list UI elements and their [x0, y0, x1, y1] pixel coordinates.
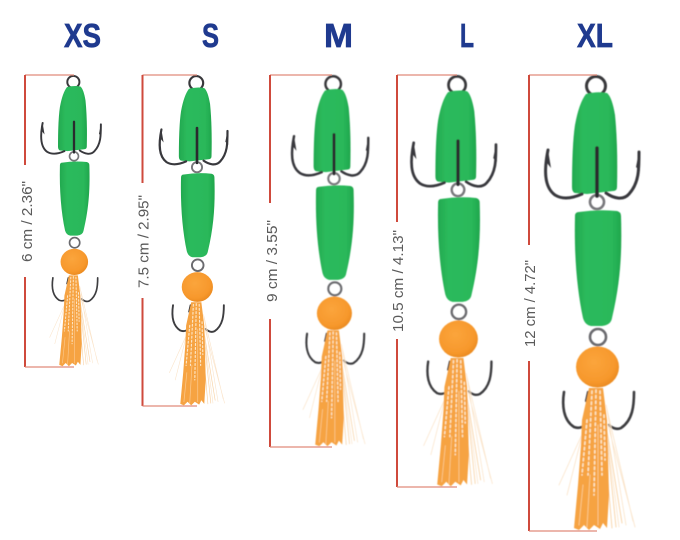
dimension label: L: 10.5 cm / 4.13" [390, 230, 407, 332]
lure: XS [41, 76, 102, 366]
dimension bracket: S [142, 75, 197, 406]
lure: XL [546, 76, 640, 530]
dimension bracket: M [270, 75, 332, 447]
lure: M [292, 76, 369, 446]
dimension bracket: XL [529, 75, 597, 531]
dimension label: XL: 12 cm / 4.72" [522, 260, 539, 347]
dimension bracket: L [397, 75, 457, 487]
lure: S [160, 76, 228, 405]
heading: M: M [324, 17, 353, 54]
heading: L: L [460, 17, 474, 54]
dimension label: S: 7.5 cm / 2.95" [136, 195, 152, 288]
lure: L [411, 76, 497, 486]
dimension label: XS: 6 cm / 2.36" [19, 181, 36, 262]
dimension label: M: 9 cm / 3.55" [264, 220, 281, 302]
heading: XL: XL [577, 17, 613, 54]
heading: XS: XS [64, 17, 101, 54]
dimension bracket: XS [25, 75, 74, 367]
heading: S: S [202, 17, 219, 54]
